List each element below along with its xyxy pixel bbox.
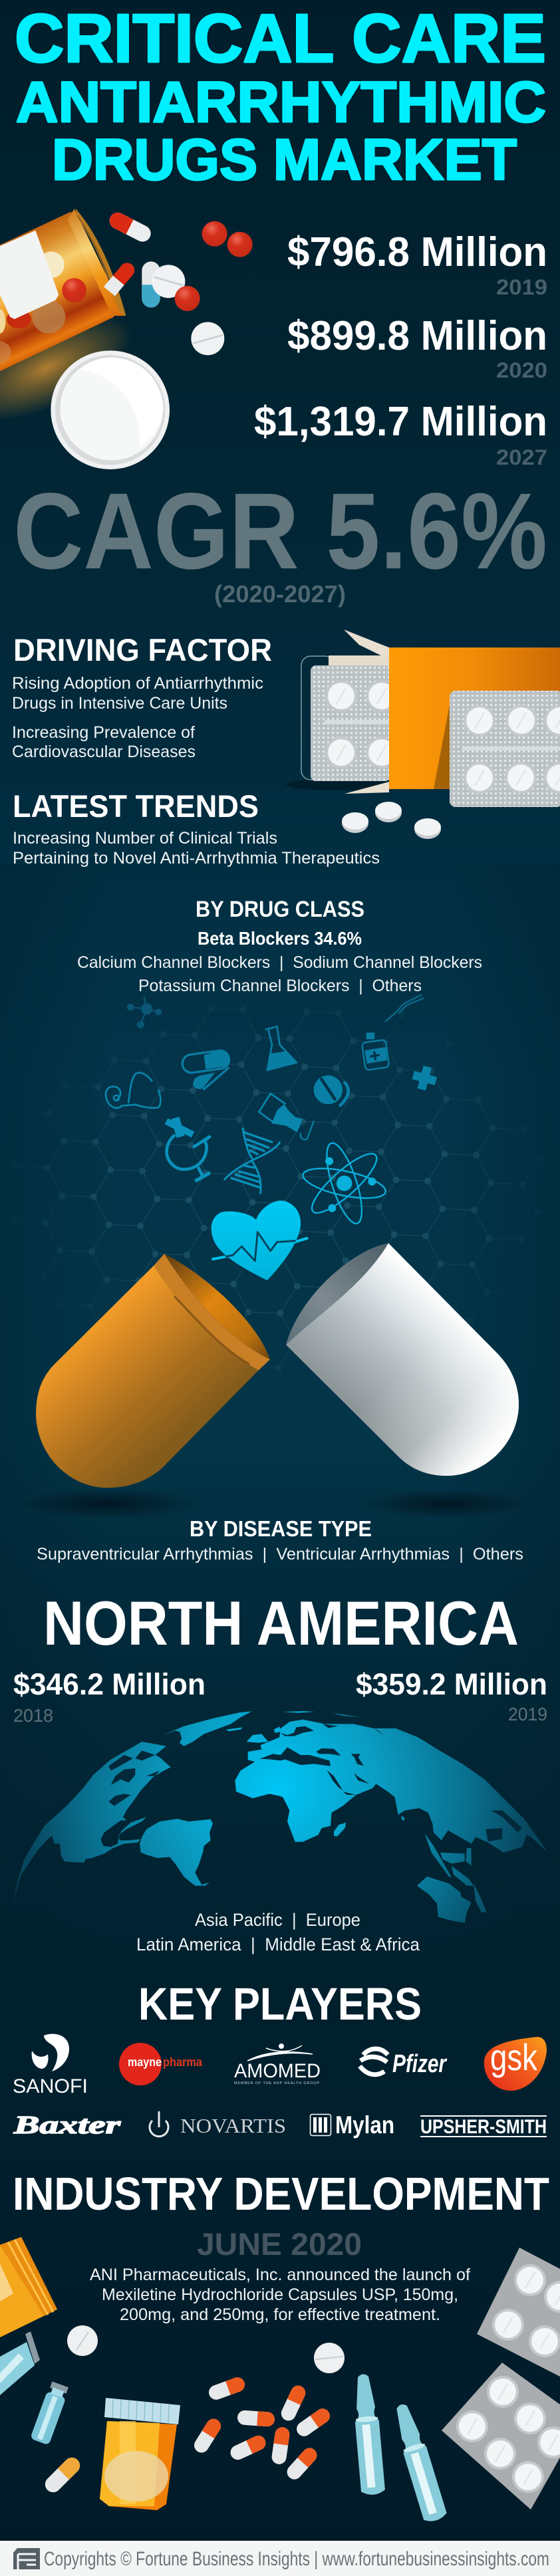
blister pack lower — [442, 2363, 560, 2510]
regional values — [13, 1667, 547, 1726]
latest trends: Increasing Number of Clinical Trials — [13, 829, 277, 848]
icon: molecule — [128, 997, 161, 1028]
icon: syringe — [386, 995, 424, 1021]
development text: 200mg, and 250mg, for effective treatment. — [120, 2305, 440, 2324]
icon: Fortune Business Insights logo — [13, 2548, 40, 2569]
icon: flask — [266, 1026, 297, 1070]
orange bottle — [0, 2237, 57, 2337]
development date: JUNE 2020 — [197, 2226, 362, 2262]
development text — [90, 2266, 470, 2324]
development text: ANI Pharmaceuticals, Inc. announced the launch of — [90, 2266, 470, 2284]
driving factor: Cardiovascular Diseases — [12, 743, 196, 761]
illustration: medicines at bottom — [0, 2237, 560, 2524]
development text: Mexiletine Hydrochloride Capsules USP, 150mg, — [102, 2285, 458, 2304]
logo: Mylan — [310, 2111, 394, 2139]
logo: Mayne Pharma: mayne — [128, 2055, 162, 2069]
logo: Pfizer — [360, 2049, 448, 2078]
icon: medicine bottle — [362, 1032, 389, 1070]
capsule: orange half — [36, 1254, 270, 1488]
icon: microscope — [166, 1118, 210, 1181]
by disease type: BY DISEASE TYPE — [190, 1516, 372, 1541]
logo: Pfizer: Pfizer — [392, 2050, 448, 2078]
latest trends — [13, 788, 380, 868]
other regions: Latin America | Middle East & Africa — [136, 1934, 420, 1954]
by drug class: Calcium Channel Blockers | Sodium Channel Blockers — [77, 953, 482, 972]
key players heading: KEY PLAYERS — [138, 1978, 422, 2030]
title: CRITICAL CARE — [15, 0, 546, 76]
market size values: 2020 — [496, 358, 547, 382]
icon: dna helix — [225, 1128, 280, 1193]
capsule yellow — [42, 2454, 83, 2496]
market size values: $796.8 Million — [287, 229, 547, 275]
logo: GSK: gsk — [490, 2036, 538, 2078]
icon: infusion bag — [259, 1094, 314, 1139]
by drug class: Beta Blockers 34.6% — [198, 928, 362, 949]
icon: cross — [410, 1064, 439, 1092]
icon: stethoscope — [106, 1073, 160, 1108]
illustration: blister packs and box — [286, 630, 560, 839]
blister pack upper — [477, 2248, 560, 2377]
north america heading: NORTH AMERICA — [43, 1588, 519, 1658]
logo: Baxter: Baxter — [13, 2111, 122, 2139]
market size values: 2019 — [496, 275, 547, 299]
regional values: 2018 — [13, 1705, 53, 1726]
illustration: world globe — [12, 1711, 548, 1923]
capsules group — [192, 2375, 333, 2482]
icon: atom — [301, 1139, 388, 1227]
logo: Mayne Pharma: pharma — [163, 2055, 203, 2069]
driving factor: Drugs in Intensive Care Units — [12, 694, 227, 713]
CAGR figure: (2020-2027) — [214, 580, 346, 608]
driving factor: Rising Adoption of Antiarrhythmic — [12, 674, 263, 693]
logo: Novartis — [150, 2111, 286, 2137]
by drug class — [77, 897, 482, 995]
icon: round pill — [314, 1076, 349, 1106]
illustration: open capsule — [14, 1243, 533, 1520]
icon: capsules — [181, 1049, 230, 1089]
illustration: medical icons — [106, 995, 439, 1280]
icon: heart with pulse — [211, 1201, 307, 1280]
tablets — [67, 2325, 98, 2356]
logo: Sanofi: SANOFI — [13, 2075, 88, 2097]
market size values: 2027 — [496, 445, 547, 469]
vial small — [30, 2381, 70, 2445]
regional values: $359.2 Million — [356, 1667, 547, 1701]
driving factor: DRIVING FACTOR — [13, 632, 272, 667]
latest trends: Pertaining to Novel Anti-Arrhythmia Therapeutics — [13, 849, 380, 868]
regional values: 2019 — [508, 1704, 547, 1724]
market size values — [254, 229, 547, 469]
market size values: $899.8 Million — [287, 313, 547, 359]
by disease type: Supraventricular Arrhythmias | Ventricular Arrhythmias | Others — [37, 1545, 523, 1564]
logo: Mayne Pharma — [119, 2043, 203, 2085]
by drug class: BY DRUG CLASS — [196, 897, 364, 922]
by drug class: Potassium Channel Blockers | Others — [138, 977, 422, 995]
by disease type — [37, 1516, 523, 1564]
latest trends: LATEST TRENDS — [13, 788, 259, 824]
logo: Mylan: Mylan — [335, 2111, 394, 2139]
logo: Amomed: AMOMED — [234, 2060, 321, 2082]
logo: Amomed: MEMBER OF THE ADP HEALTH GROUP — [234, 2081, 319, 2085]
other regions — [136, 1910, 420, 1954]
title — [15, 0, 546, 192]
market size values: $1,319.7 Million — [254, 399, 547, 445]
logo: Sanofi — [13, 2034, 88, 2097]
driving factor: Increasing Prevalence of — [12, 723, 195, 742]
title: ANTIARRHYTHMIC — [16, 70, 546, 134]
logo: GSK — [484, 2036, 547, 2091]
logo: Amomed — [234, 2044, 321, 2085]
footer — [0, 2541, 560, 2576]
orange jar — [100, 2398, 180, 2510]
other regions: Asia Pacific | Europe — [195, 1910, 360, 1930]
illustration: spilled pill bottle — [0, 208, 253, 469]
ampoules — [351, 2373, 448, 2524]
logo: Novartis: NOVARTIS — [180, 2114, 286, 2137]
regional values: $346.2 Million — [13, 1667, 206, 1701]
vial large — [0, 2331, 40, 2395]
capsule: white half — [286, 1243, 519, 1476]
driving factor — [12, 632, 272, 761]
title: DRUGS MARKET — [52, 128, 517, 192]
